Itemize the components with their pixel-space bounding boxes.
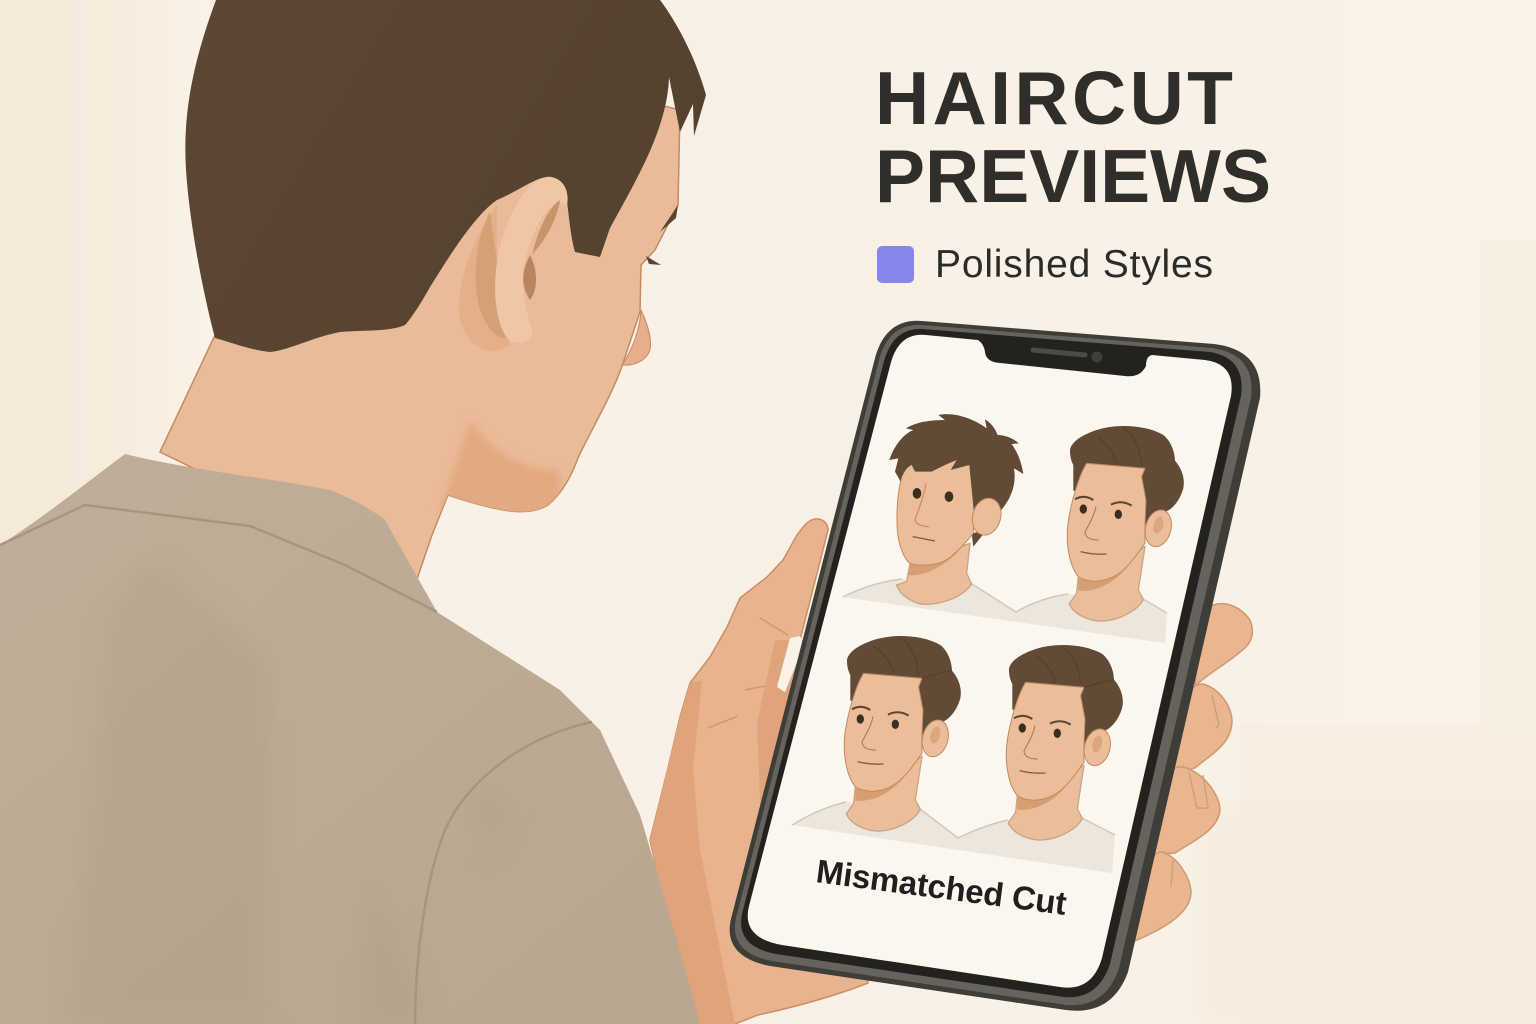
legend: polished styles	[877, 243, 1213, 286]
hair back	[972, 530, 987, 547]
inner ear lower	[523, 255, 536, 300]
legend swatch	[877, 246, 914, 283]
inner ear	[1152, 515, 1165, 535]
neck	[1008, 766, 1084, 840]
hair strands	[1097, 428, 1142, 465]
nose	[1085, 507, 1099, 540]
mouth	[1081, 552, 1107, 554]
eyebrow and lash	[646, 205, 678, 265]
phone	[730, 321, 1260, 1011]
avatar: polished style, bottom right	[1006, 645, 1123, 840]
inner ear	[1091, 734, 1104, 754]
finger 1	[1195, 604, 1252, 686]
neck	[846, 757, 922, 831]
hand holding phone	[650, 519, 1252, 1024]
jaw shadow	[1078, 565, 1128, 591]
shirt shade folds	[70, 560, 510, 1024]
face	[1006, 682, 1085, 800]
phone caption: Mismatched Cut	[814, 852, 1069, 922]
hair	[889, 414, 1023, 513]
face	[897, 455, 975, 565]
face	[844, 673, 923, 791]
avatar: messy hair, top left	[889, 414, 1023, 604]
ear shadow inner	[476, 212, 510, 338]
palm creases	[708, 618, 788, 728]
eyes	[857, 714, 899, 729]
avatar: polished style, bottom left	[844, 636, 961, 831]
hair	[847, 636, 961, 736]
ear	[1141, 507, 1175, 550]
neck	[897, 543, 972, 604]
inner ear	[532, 200, 560, 255]
inner ear	[929, 725, 942, 745]
nose	[622, 310, 651, 365]
background gap at thumb	[777, 636, 804, 692]
phone speaker and camera	[1033, 350, 1102, 362]
ear	[918, 717, 952, 760]
mouth	[1020, 771, 1046, 773]
finger 3	[1150, 767, 1220, 855]
brows	[852, 707, 909, 716]
palm and thumb	[650, 519, 868, 1024]
nose	[915, 483, 929, 527]
neck and face	[160, 80, 680, 585]
nose	[1024, 726, 1038, 759]
eyes	[1080, 504, 1122, 519]
jaw shadow	[908, 552, 958, 575]
phone grey band	[735, 325, 1252, 1005]
finger 2	[1170, 684, 1232, 775]
hair strands and part	[1036, 647, 1114, 687]
shoulders band, top row	[843, 579, 1167, 643]
phone screen	[748, 335, 1232, 988]
title: HAIRCUT	[875, 56, 1233, 140]
phone black bezel	[741, 329, 1242, 997]
ear	[968, 495, 1005, 538]
brows	[1075, 497, 1132, 506]
mouth	[913, 537, 935, 541]
hair	[1009, 645, 1123, 745]
shirt	[0, 454, 700, 1024]
shirt sleeve seam	[415, 722, 592, 1024]
phone outer frame	[730, 321, 1260, 1011]
legend label: Polished Styles	[935, 243, 1213, 286]
nose	[862, 717, 876, 750]
mouth	[858, 762, 884, 764]
jaw shadow	[1017, 784, 1067, 810]
brows	[1014, 716, 1071, 725]
ear shadow	[459, 205, 510, 351]
neck shadow	[441, 424, 562, 512]
jaw shadow	[855, 775, 905, 801]
shirt collar line	[0, 505, 437, 612]
finger nail lines	[1171, 695, 1219, 887]
hair strands and part	[874, 638, 952, 678]
eyes	[1019, 723, 1061, 738]
title	[875, 56, 1271, 218]
avatar: polished style, top right	[1067, 426, 1184, 621]
man figure viewed from behind	[0, 0, 706, 1024]
face	[1067, 463, 1146, 581]
hair	[1070, 426, 1184, 526]
eyes	[913, 488, 953, 502]
shoulders band, bottom row	[792, 802, 1115, 873]
hair	[185, 0, 706, 352]
neck	[1069, 547, 1145, 621]
finger 4	[1125, 852, 1191, 941]
title: PREVIEWS	[875, 134, 1271, 218]
ear	[1080, 726, 1114, 769]
ear	[495, 177, 568, 343]
palm shaded bands	[650, 640, 820, 1024]
